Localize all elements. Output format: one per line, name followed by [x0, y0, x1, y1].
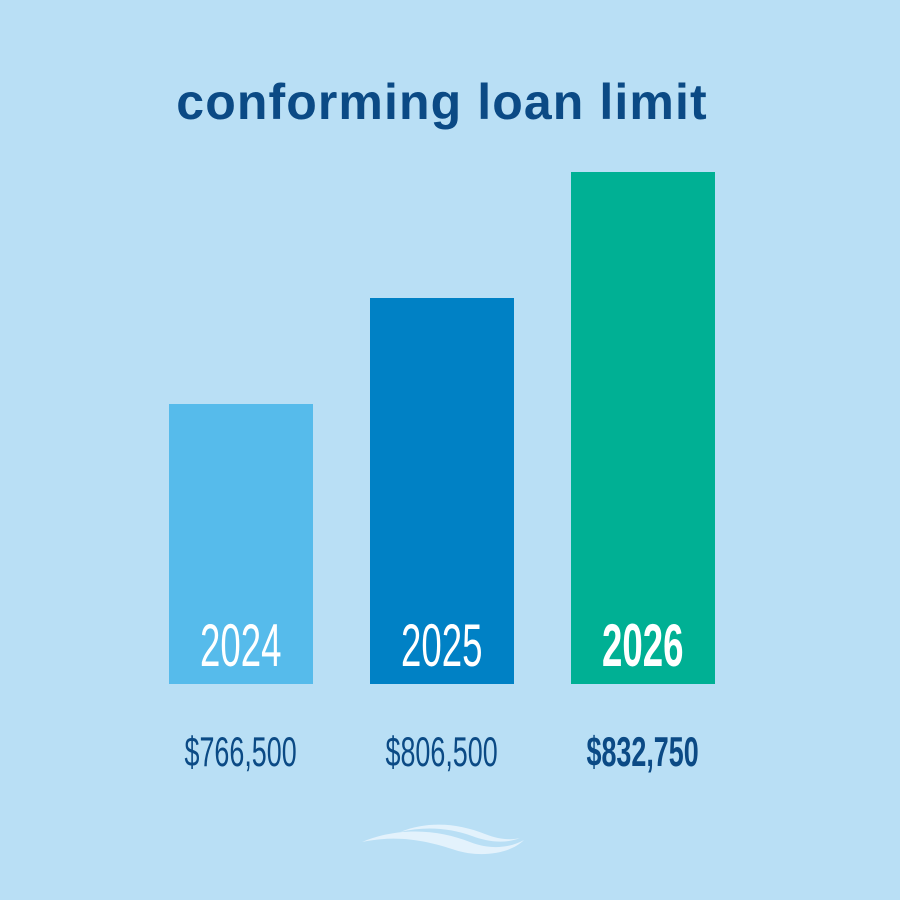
title: conforming loan limit — [176, 74, 708, 130]
bar: 2026 — [571, 172, 715, 684]
value: 2024: $766,500 — [185, 728, 297, 775]
bar: 2025 — [370, 298, 514, 684]
value: 2026: $832,750 — [587, 728, 699, 775]
label: 2025: 2025 — [401, 612, 483, 679]
label: 2024: 2024 — [200, 612, 282, 679]
label: 2026: 2026 — [602, 612, 684, 679]
logo: waves — [362, 824, 524, 854]
value: 2025: $806,500 — [386, 728, 498, 775]
bar: 2024 — [169, 404, 313, 684]
